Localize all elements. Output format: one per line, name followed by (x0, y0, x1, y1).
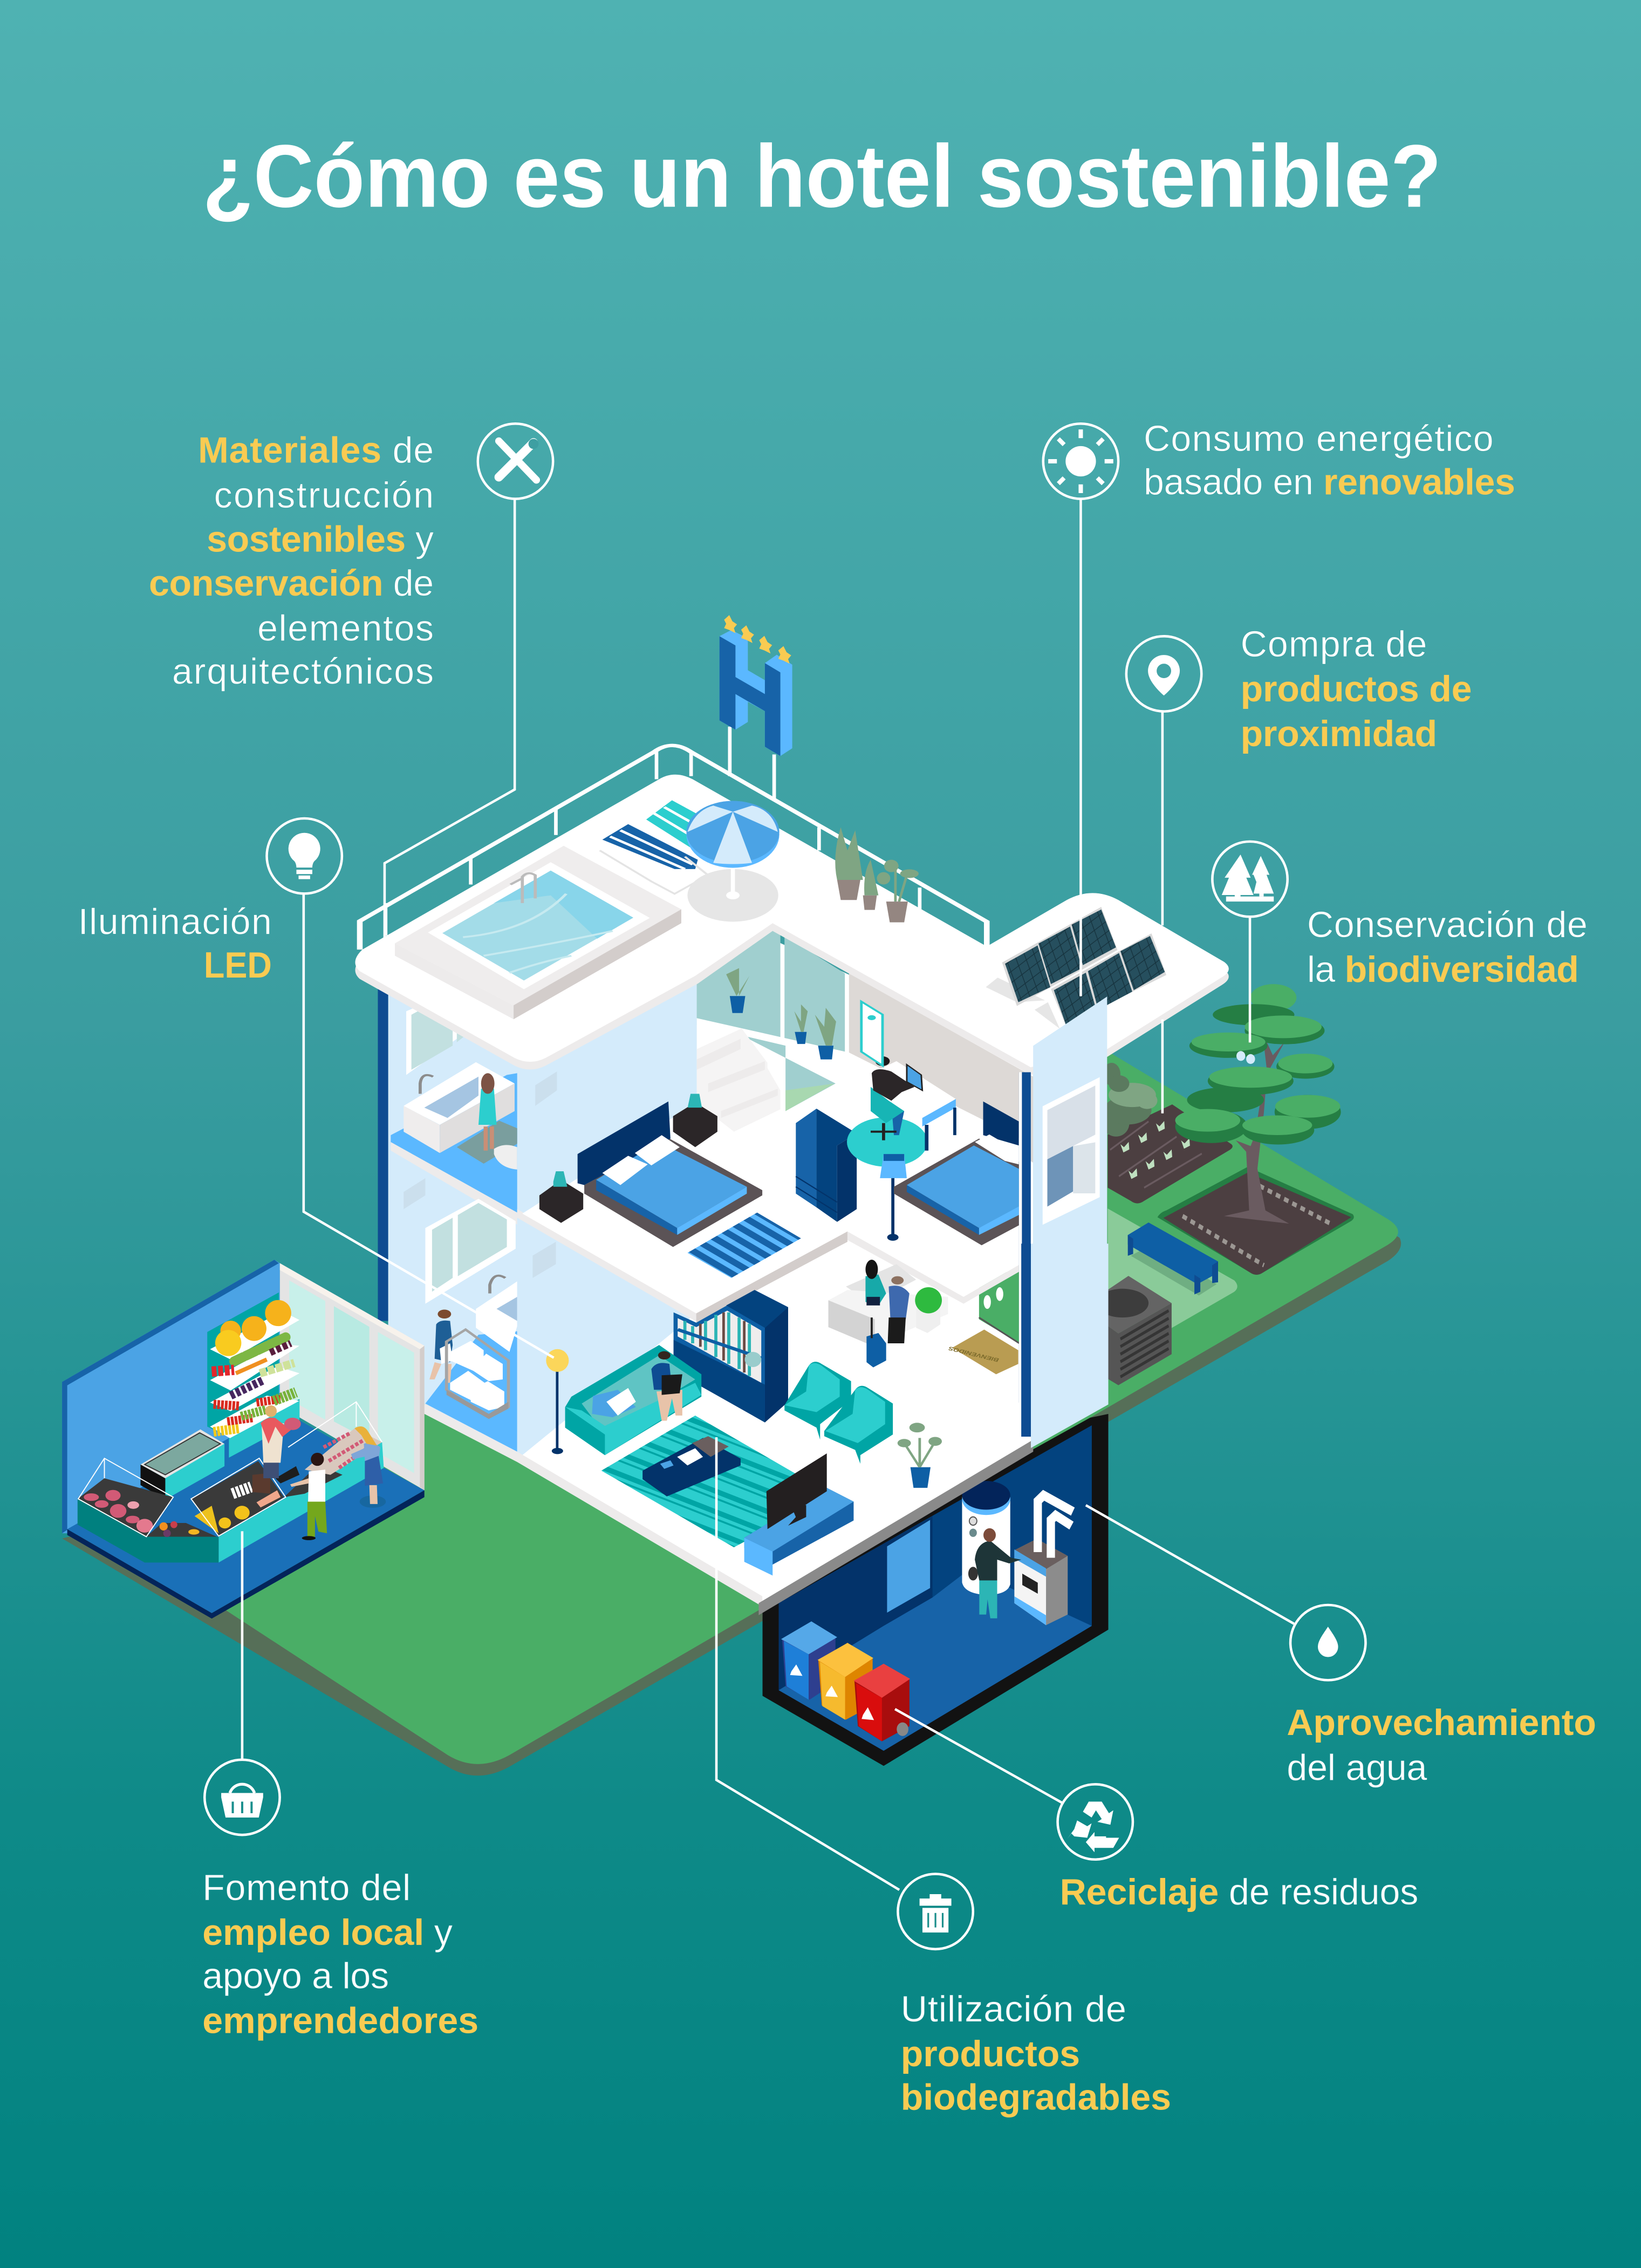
text: compra de productos (1241, 624, 1472, 754)
tree planter (1158, 1167, 1354, 1275)
front lamp (546, 1349, 569, 1454)
yellow recycling bin (818, 1643, 873, 1720)
roof (355, 615, 1229, 1075)
right tower wall (1019, 996, 1107, 1403)
text: biodiversidad: Conservación de (1307, 904, 1588, 945)
pool (395, 846, 681, 1019)
text: compra de productos: productos de (1241, 668, 1472, 709)
reception desk (829, 1264, 948, 1347)
guest in bathroom (478, 1073, 496, 1151)
roof deck (355, 775, 1229, 1067)
icon: location pin (1126, 636, 1201, 712)
text: biodegradables (901, 1989, 1171, 2117)
first floor slab (517, 1018, 1020, 1323)
icon: sun (1043, 423, 1118, 499)
store floor (67, 1410, 425, 1618)
hotel interior (378, 905, 1033, 1615)
text: materiales: sostenibles y (207, 518, 434, 559)
title: ¿Cómo es un hotel sostenible? (202, 126, 1441, 226)
wall art (861, 1002, 883, 1065)
ground floor slab (425, 1238, 1033, 1615)
vegetable plot (1107, 1104, 1233, 1204)
icon: light bulb (266, 818, 342, 893)
lounge armchairs (784, 1362, 893, 1464)
suitcase (866, 1317, 886, 1368)
text: materiales: arquitectónicos (172, 651, 434, 692)
bed one (578, 1102, 762, 1247)
hotel H sign (720, 615, 792, 756)
customer in white (290, 1453, 327, 1540)
water heater tank (962, 1481, 1010, 1595)
icon: recycle (1058, 1784, 1133, 1860)
text: biodegradables: productos (901, 2033, 1080, 2074)
rooftop railing (360, 727, 987, 949)
bed two (894, 1102, 1020, 1245)
pendant lamps (972, 1287, 1003, 1317)
icon: shopping basket (204, 1760, 280, 1835)
bookshelf (674, 1290, 788, 1423)
guest with laptop (651, 1351, 682, 1420)
text: materiales: conservación de (149, 563, 434, 604)
welcome mat (947, 1329, 1018, 1374)
basement door (887, 1520, 930, 1613)
text: materiales (149, 430, 434, 692)
red recycling bin (854, 1664, 910, 1741)
text: agua: Aprovechamiento (1287, 1702, 1596, 1743)
floor lamp (880, 1154, 907, 1241)
bushes (1103, 1063, 1158, 1137)
welcome mat: BIENVENIDOS (947, 1345, 1000, 1363)
sun loungers (600, 800, 716, 894)
icon: trash can (898, 1874, 973, 1949)
icon: tools (478, 423, 553, 499)
text: materiales: elementos (257, 607, 434, 648)
meat counter (78, 1478, 218, 1562)
text: biodiversidad (1307, 904, 1588, 990)
housekeeper and linen cart (429, 1309, 508, 1419)
garden details (1097, 984, 1354, 1385)
text: compra de productos: Compra de (1241, 624, 1427, 665)
potted plant (898, 1423, 942, 1488)
text: empleo local: apoyo a los (202, 1955, 389, 1996)
text: materiales: construcción (214, 475, 434, 516)
left outer wall (378, 973, 388, 1321)
text: biodegradables: biodegradables (901, 2076, 1171, 2117)
text: iluminación LED (78, 901, 272, 986)
television and console (744, 1453, 853, 1575)
text: materiales: Materiales de (198, 430, 434, 471)
sofa (565, 1345, 701, 1455)
roof edge (355, 782, 1229, 1075)
tower window (1043, 1077, 1100, 1225)
wardrobe (796, 1109, 857, 1222)
text: biodegradables: Utilización de (901, 1989, 1126, 2030)
text: compra de productos: proximidad (1241, 713, 1437, 754)
store window wall (280, 1263, 425, 1490)
blue recycling bin (781, 1621, 837, 1700)
customer in blue (351, 1426, 386, 1508)
text: biodiversidad: la biodiversidad (1307, 949, 1579, 990)
icon: trees (1212, 842, 1288, 917)
text: empleo local: Fomento del (202, 1867, 411, 1908)
roof plants (835, 827, 919, 923)
parasol (686, 801, 780, 921)
text: consumo energético: basado en renovables (1144, 462, 1515, 503)
text: agua (1287, 1702, 1596, 1788)
text: consumo energético (1144, 418, 1515, 503)
basement (763, 1414, 1109, 1766)
nightstand two (673, 1094, 717, 1147)
mezzanine pot plant (726, 968, 749, 1013)
path and bench (1107, 1208, 1237, 1365)
stairs and lower window (697, 1028, 836, 1132)
interior backing (388, 905, 1033, 1603)
lower side wall, slab and bath (391, 1071, 695, 1455)
tree (1175, 984, 1341, 1224)
text: empleo local: emprendedores (202, 2000, 478, 2041)
back glazing and wall (697, 922, 1033, 1163)
text: iluminación LED: LED (204, 945, 272, 986)
solar panels (986, 907, 1166, 1029)
striped rug (687, 1213, 801, 1278)
butcher (261, 1405, 301, 1478)
ground plane: garden (62, 1051, 1401, 1775)
desk workstation (847, 1056, 956, 1167)
leader lines (242, 499, 1294, 1890)
receptionist and guest (865, 1260, 910, 1343)
air conditioning unit (1097, 1276, 1172, 1385)
icon: water drop (1290, 1605, 1365, 1680)
produce shelves (207, 1293, 299, 1458)
lounge rug and coffee table (601, 1416, 832, 1547)
freezer chest (140, 1430, 224, 1500)
glass cases (78, 1402, 382, 1537)
text: reciclaje: Reciclaje de residuos (1060, 1871, 1418, 1912)
grocery store (62, 1260, 425, 1618)
mezzanine plants (794, 1005, 836, 1060)
text: empleo local: empleo local y (202, 1912, 453, 1953)
nightstand one (539, 1171, 583, 1223)
boiler with pipes (1014, 1495, 1073, 1625)
back counter (218, 1429, 384, 1562)
technician (975, 1528, 1021, 1618)
upper bathroom (391, 980, 517, 1213)
text: iluminación LED: Iluminación (78, 901, 272, 942)
text: consumo energético: Consumo energético (1144, 418, 1494, 459)
dairy display (192, 1461, 284, 1537)
store back wall (62, 1260, 280, 1533)
text: empleo local (202, 1867, 478, 2041)
tower lower section and strip (1021, 1244, 1109, 1448)
text: agua: del agua (1287, 1747, 1427, 1788)
